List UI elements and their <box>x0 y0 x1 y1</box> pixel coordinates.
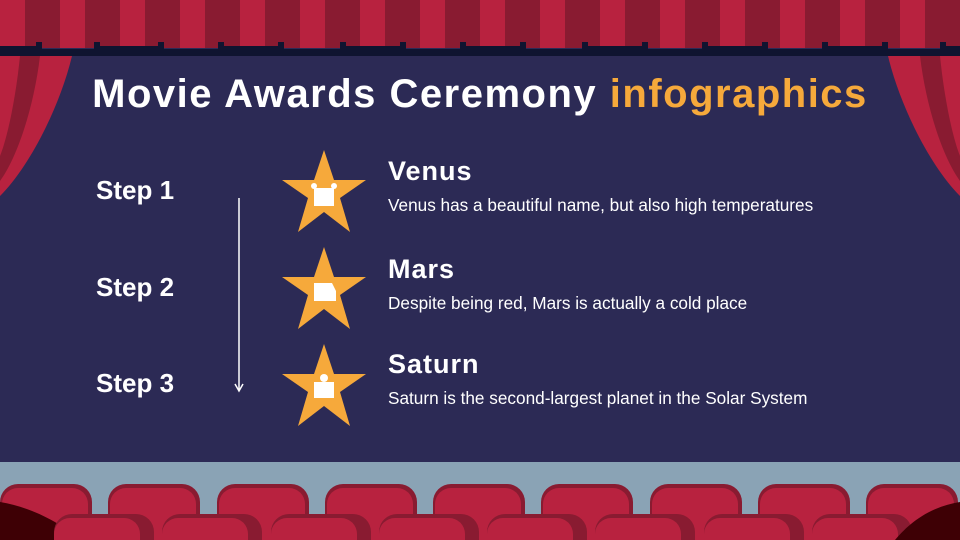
curtain valance <box>0 0 960 56</box>
text: Step 2 <box>96 272 174 302</box>
stars with icons <box>282 150 366 426</box>
arrow <box>234 198 244 392</box>
text: Venus has a beautiful name, but also high temperatures <box>388 195 813 215</box>
text: Saturn <box>388 349 480 379</box>
title: Movie Awards Ceremony infographics <box>92 72 868 116</box>
left curtain <box>0 56 72 196</box>
text: Step 3 <box>96 368 174 398</box>
text: Mars <box>388 254 455 284</box>
text: Saturn is the second-largest planet in the Solar System <box>388 388 807 408</box>
text: Despite being red, Mars is actually a cold place <box>388 293 747 313</box>
step 2 text <box>388 254 747 313</box>
step labels <box>96 175 174 398</box>
step 1 text <box>388 156 813 215</box>
floor with seats <box>0 462 960 540</box>
text: Step 1 <box>96 175 174 205</box>
text: Venus <box>388 156 473 186</box>
step 3 text <box>388 349 807 408</box>
right curtain <box>888 56 960 196</box>
